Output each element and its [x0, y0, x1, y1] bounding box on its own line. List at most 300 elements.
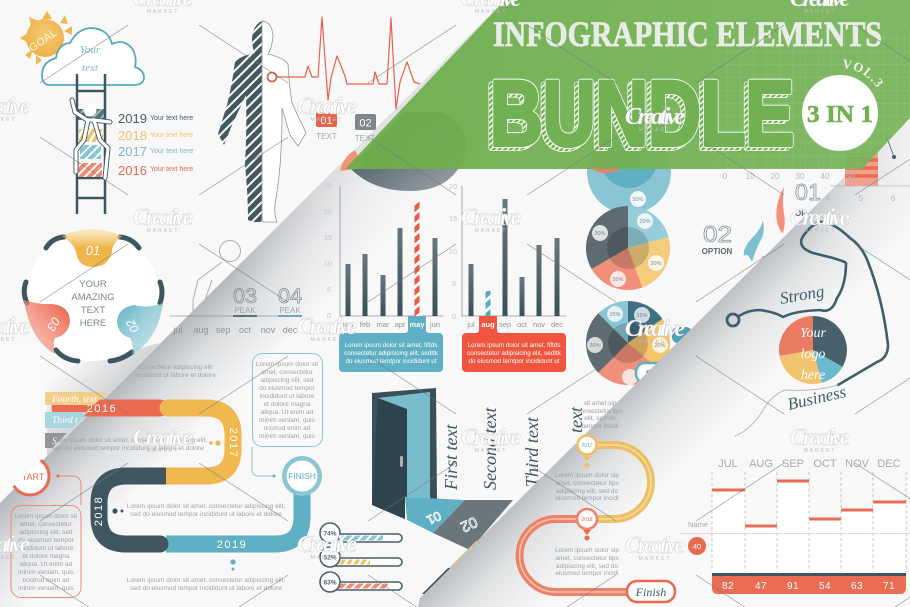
month labels: nov: [261, 325, 276, 335]
note box: red: do eiusmod temtpor incididunt ut: [468, 358, 560, 365]
legend: 2016: Your text here: [150, 166, 193, 173]
month labels: apr: [395, 320, 406, 329]
logo text: logo: [801, 347, 825, 362]
watermarks: MARKET: [147, 448, 179, 454]
bundle title: BUNDLE: [490, 63, 794, 165]
year legend: [118, 111, 193, 178]
marker: 2017: [578, 436, 596, 468]
pie chart: lower: 15%: [636, 313, 648, 319]
badge: 3 in 1: [802, 75, 878, 151]
step: teal: [80, 145, 101, 159]
bar chart: right: 15: [449, 214, 457, 223]
note box: red: Lorem ipsum dolor sit amet, fiftds: [468, 342, 560, 349]
fourth rotated label: text: [566, 406, 586, 433]
month labels: [718, 458, 901, 470]
option 01: OP: [795, 209, 807, 218]
option 01: [795, 179, 821, 218]
watermarks: MARKET: [311, 337, 343, 343]
month labels: feb: [360, 320, 370, 329]
segment: gold 2017: [166, 408, 233, 476]
flame: orange: [776, 187, 785, 233]
outline note box: teal: incididunt ut labore: [260, 393, 315, 400]
option text lines: 4 Your text: [756, 269, 791, 278]
month labels: aug: [193, 325, 209, 335]
y axis labels: 10: [324, 259, 332, 268]
snake captions: adipiscing elit, sed do: [556, 488, 618, 495]
axis numbers: 4: [826, 194, 831, 203]
totals bar: 91: [787, 581, 799, 592]
outline note box: teal: do eiusmod tempor: [259, 385, 316, 392]
label: Strong: Strong: [778, 281, 826, 308]
progress bars: [320, 523, 402, 592]
sun label: GOAL: [27, 27, 59, 54]
watermarks: MARKET: [147, 9, 179, 15]
petal: gold 01: 01: [86, 243, 100, 258]
rotated labels: Third text: [522, 416, 542, 487]
bar chart: right: 10: [449, 247, 457, 256]
axis numbers: 50: [846, 172, 855, 181]
icon: sun: [26, 19, 64, 57]
option 02: OPTION: [702, 247, 733, 256]
snake captions: tempor incidi: [582, 423, 618, 430]
rotated labels: [441, 407, 542, 491]
option text lines: text: [778, 240, 791, 249]
pie chart: middle: 30%: [594, 231, 606, 237]
totals bar: 63: [851, 581, 863, 592]
finish circle: FINISH: [288, 471, 316, 481]
door panel: [372, 398, 407, 520]
snake captions: amet, consectetur itps: [555, 480, 620, 487]
watermarks: MARKET: [639, 127, 671, 133]
step: yellow: [79, 129, 103, 142]
pie chart: lower: [586, 301, 670, 385]
snake captions: elit, sed do: [584, 415, 616, 422]
peak 04: PEAK: [279, 306, 301, 315]
legend: 2019: Your text here: [150, 115, 193, 122]
watermarks: MARKET: [639, 339, 671, 345]
legend: 2017: 2017: [118, 144, 147, 159]
outline note box: red: do eiusmod tempor: [18, 537, 75, 544]
ladder with climber: [72, 74, 110, 214]
month labels: may: [409, 320, 425, 329]
green banner: [345, 0, 910, 169]
outline note box: red: et dolore magna: [23, 553, 70, 560]
timeline captions: consectetur adipiscing elit: [138, 364, 212, 371]
snake timeline: [520, 436, 675, 602]
outline note box: red: [11, 474, 81, 598]
segment: dark 2018: [99, 476, 166, 544]
petal: red 03: 03: [44, 315, 63, 334]
option text lines: Your text: [762, 255, 791, 264]
segment: gold: [450, 540, 477, 567]
figure: striped half: [218, 21, 262, 222]
month labels: OCT: [813, 458, 837, 470]
pie chart: middle: 30%: [650, 261, 662, 267]
chart: peak axis: [170, 181, 332, 335]
axis numbers: 0: [723, 172, 728, 181]
start circle: START: [16, 472, 45, 482]
stepped column chart: [680, 458, 910, 594]
month labels: mar: [377, 320, 390, 329]
snake captions: amet, consectetur itps: [555, 555, 620, 562]
option 01: 01: [795, 179, 821, 205]
bar chart: right: 5: [452, 279, 456, 288]
month labels: oct: [517, 320, 528, 329]
step: orange: [78, 163, 102, 177]
step: dark: [78, 109, 104, 120]
peak 04: [278, 285, 302, 317]
watermarks: Creative: [790, 425, 850, 451]
badge 01: 01: [320, 115, 333, 127]
note box: teal: [339, 333, 443, 372]
watermarks: Creative: [133, 205, 193, 231]
snake captions: Lorem ipsum dolor sip: [555, 547, 619, 554]
folded ribbon: 01 and 02: [405, 497, 513, 594]
outline note box: teal: aliqua. Ut enim ad: [261, 409, 314, 416]
month labels: aug: [481, 320, 495, 329]
year labels: 2016: [87, 403, 117, 415]
peak 03: 03: [233, 285, 257, 308]
axis numbers: 40: [821, 172, 830, 181]
month labels: [342, 320, 440, 329]
door frame: [372, 388, 437, 505]
segment: teal 2019: [166, 490, 302, 544]
marker: 2018: [577, 509, 597, 540]
finish circle: [282, 456, 322, 496]
label: Business: Business: [786, 382, 848, 414]
center text: [71, 279, 115, 329]
outline note box: red: minim veniam, quis: [18, 569, 75, 576]
segment: dark: [422, 563, 477, 594]
segment: red 2016: [60, 400, 160, 416]
snake captions: consectetur itps: [577, 408, 624, 415]
ring start: [727, 314, 739, 326]
year labels: 2019: [217, 539, 247, 551]
snake captions: [555, 400, 624, 577]
bundle title: BUNDLE: [486, 66, 790, 168]
timeline captions: sed do eiusmod tempor incididunt ut labore et dolore: [130, 585, 282, 592]
totals bar: 54: [819, 581, 831, 592]
progress: 74%: 74%: [323, 530, 337, 538]
watermarks: MARKET: [311, 555, 343, 561]
door illustration: [372, 388, 437, 520]
dark bowl behind banner: [350, 112, 467, 191]
outline note box: teal: nostrud enim ad: [264, 425, 311, 432]
peak 04: 04: [278, 285, 302, 308]
totals bar: 82: [722, 581, 734, 592]
y axis labels: 5: [327, 285, 331, 294]
outline note box: red: incididunt ut labore: [19, 545, 74, 552]
climber: [72, 100, 110, 178]
logo pie: [779, 316, 847, 384]
icon: cloud: [42, 28, 144, 85]
totals bar: [712, 573, 906, 594]
rotated labels: Second text: [480, 407, 500, 490]
legend: 2019: [118, 111, 193, 126]
note box: red: consectetur adipisicing elit, sedttk: [467, 350, 562, 357]
level markers: [712, 480, 906, 528]
year labels: [87, 403, 247, 551]
outline note box: red: Lorem ipsum dolor sit: [15, 513, 77, 520]
axis numbers: 30: [796, 172, 805, 181]
year labels: 2018: [93, 496, 105, 526]
timeline captions: Lorem ipsum dolor sit amet, consectetur adipiscing elit,: [127, 577, 285, 584]
badge 02: TEXT: [355, 134, 375, 143]
note box: teal: do eiusmod temtpor incididunt ut: [345, 358, 437, 365]
cloud text: [80, 44, 101, 74]
watermarks: MARKET: [804, 228, 836, 234]
pie chart: lower: 20%: [654, 343, 666, 349]
note box: teal: consectetur adipisicing elit, sedttk: [344, 350, 439, 357]
cloud text: text: [82, 62, 99, 74]
progress: 52%: 52%: [323, 554, 337, 562]
month labels: sep: [216, 325, 230, 335]
watermarks: MARKET: [804, 9, 836, 15]
note box: red: [462, 333, 566, 372]
finish pill: Finish: [635, 585, 666, 599]
small orange arc behind banner: [340, 150, 364, 171]
month labels: oct: [239, 325, 251, 335]
year labels: 2017: [227, 428, 239, 458]
axis numbers: 10: [746, 172, 755, 181]
fold shadow fade near top right: [700, 112, 910, 320]
start pill: [636, 327, 692, 383]
month labels: jan: [342, 320, 353, 329]
legend: 2017: Your text here: [150, 148, 193, 155]
month labels: sep: [499, 320, 511, 329]
peak 03: [233, 285, 257, 317]
logo text: here: [801, 368, 825, 383]
figure: outline half: [262, 21, 306, 222]
column fill: [712, 481, 906, 573]
center text: AMAZING: [71, 292, 115, 303]
value badge: [688, 537, 706, 555]
timeline dots: [112, 440, 236, 570]
marker: 2018: 2018: [581, 517, 593, 523]
month labels: [172, 325, 298, 335]
watermarks: MARKET: [475, 9, 507, 15]
banner grid: [720, 30, 910, 169]
month labels: [466, 320, 563, 329]
axis numbers: 5: [859, 194, 864, 203]
outline note box: teal: adipiscing elit, sed: [260, 377, 314, 384]
start circle: [11, 457, 49, 495]
month labels: jun: [429, 320, 440, 329]
watermarks: Creative: [297, 94, 357, 120]
human figure: [218, 21, 306, 222]
option text lines: [756, 240, 791, 278]
highlighted bar: may: [414, 202, 420, 316]
timeline captions: [49, 364, 285, 592]
outline note box: red: adipiscing elit, sed: [19, 529, 73, 536]
marker: 2017: 2017: [581, 443, 593, 449]
axis numbers: 20: [771, 172, 780, 181]
watermarks: MARKET: [475, 448, 507, 454]
month labels: dec: [283, 325, 298, 335]
axis numbers: [723, 172, 896, 203]
logo text: [800, 326, 827, 383]
timeline captions: Lorem ipsum dolor sit amet, consectetur adipiscing elit,: [49, 437, 207, 444]
value badge: 40: [693, 542, 701, 551]
outline note box: teal: [252, 354, 322, 478]
legend: 2018: 2018: [118, 128, 147, 143]
path: gold: [595, 445, 651, 519]
tab: third: Third t: [52, 416, 78, 426]
logo text: Your: [800, 326, 827, 341]
watermarks: Creative: [297, 314, 357, 340]
legend: 2018: Your text here: [150, 132, 193, 139]
pie chart: middle: 20%: [639, 219, 651, 225]
rotated labels: First text: [441, 424, 461, 491]
option 02: [702, 221, 733, 256]
badge 02: [355, 114, 376, 143]
month labels: dec: [551, 320, 563, 329]
timeline captions: sed do eiusmod tempor incididunt ut labore et dolore: [52, 445, 204, 452]
month labels: nov: [533, 320, 545, 329]
y axis labels: 15: [324, 233, 332, 242]
ecg line: [277, 17, 420, 109]
bar chart: right: 0: [452, 312, 456, 321]
muscle arm outline: [727, 222, 888, 436]
outline note box: teal: et dolore magna: [264, 401, 311, 408]
watermarks: MARKET: [475, 228, 507, 234]
pie chart: lower: 30%: [589, 343, 601, 349]
timeline captions: incididunt ut labore et dolore: [134, 372, 216, 379]
watermarks: Creative: [461, 425, 521, 451]
watermarks: Creative: [625, 104, 685, 130]
month labels: JUL: [718, 458, 738, 470]
badge 02: 02: [359, 118, 372, 130]
finish pill: [627, 581, 675, 602]
center text: YOUR: [79, 279, 107, 290]
badge: 3 in 1: 3 IN 1: [807, 102, 873, 128]
month labels: SEP: [782, 458, 804, 470]
door handle: [400, 456, 403, 467]
note box: teal: Lorem ipsum dolor sit amet, fiftds: [345, 342, 437, 349]
axis numbers: 6: [891, 194, 896, 203]
upper left page: sun and cloud: [20, 11, 144, 85]
watermarks: Creative: [625, 533, 685, 559]
option 02: 02: [703, 221, 732, 247]
white flap on left: [0, 340, 45, 499]
pie chart: middle: 20%: [612, 277, 624, 283]
tab: second: S: [52, 437, 57, 447]
partial person outline behind fold: [193, 240, 240, 330]
petal: teal 02: 02: [123, 316, 142, 335]
snake captions: sit amet sip: [584, 400, 617, 407]
path: red: [520, 519, 632, 592]
month labels: jul: [172, 325, 183, 335]
heart marker: [268, 72, 276, 82]
watermarks: Creative: [625, 316, 685, 342]
donut chart: top, cut by banner: [587, 130, 671, 214]
circle body: [27, 229, 159, 361]
watermarks: MARKET: [311, 117, 343, 123]
bar chart: right: [449, 182, 566, 372]
tab bars on flap: [45, 392, 107, 448]
badge 01: [316, 112, 337, 141]
y axis labels: 25: [324, 181, 332, 190]
dark arcs: [24, 237, 162, 361]
outline note box: red: aliqua. Ut enim ad: [20, 561, 73, 568]
month labels: jul: [466, 320, 475, 329]
timeline captions: sed do eiusmod tempor incididunt ut labore et dolore: [130, 511, 282, 518]
totals bar: 71: [883, 581, 895, 592]
outline note box: teal: minim veniam, quis: [259, 417, 316, 424]
legend: 2016: 2016: [118, 163, 147, 178]
progress: 83%: 83%: [323, 580, 337, 586]
center text: HERE: [80, 318, 106, 329]
vol label: VOL.3: [843, 59, 883, 87]
bundle title: BUNDLE: [490, 63, 794, 165]
icon: sun rays: [20, 11, 72, 65]
flame: teal: [744, 216, 764, 262]
highlighted bar: aug: [486, 291, 490, 316]
month tab: aug: [475, 316, 501, 333]
y axis labels: 0: [327, 311, 331, 320]
peak 03: PEAK: [234, 306, 256, 315]
center text: TEXT: [81, 305, 105, 316]
watermarks: Creative: [133, 425, 193, 451]
watermarks: MARKET: [639, 556, 671, 562]
timeline ribbon: [60, 408, 302, 544]
month labels: DEC: [877, 458, 901, 470]
month tab: may: [404, 316, 430, 333]
pie chart: lower: 15%: [609, 312, 621, 318]
badge 01: TEXT: [316, 132, 337, 141]
snake captions: adipiscing elit, sed do: [556, 563, 618, 570]
watermarks: Creative: [790, 205, 850, 231]
fold shadow triangle below circle: [47, 343, 160, 456]
legend: 2019: 2019: [118, 111, 147, 126]
month labels: NOV: [845, 458, 870, 470]
snake captions: eiusmod tempor incidi: [555, 495, 619, 502]
tab: fourth: Fourth, text: [51, 395, 97, 405]
fold shadow: lower right page: [418, 112, 910, 607]
totals bar: 47: [755, 581, 767, 592]
striped bar: [845, 153, 878, 186]
watermarks: MARKET: [147, 228, 179, 234]
donut chart: top, cut by banner: 50%: [632, 197, 644, 203]
snake captions: eiusmod tempor incidi: [555, 570, 619, 577]
watermarks: Creative: [461, 205, 521, 231]
outline note box: red: amet, consectetur: [20, 521, 73, 528]
segment: 01: 01: [424, 508, 444, 528]
pie chart: middle: [586, 206, 670, 290]
outline note box: red: minim veniam, quis: [18, 585, 75, 592]
bundle title: BUNDLE: [486, 66, 790, 168]
y axis labels: [324, 181, 332, 320]
outline note box: teal: amet, consectetur: [261, 369, 314, 376]
legend: 2018: [118, 128, 193, 143]
outline note box: teal: minim veniam, quis: [259, 433, 316, 440]
outline note box: teal: Lorem ipsum dolor sit: [256, 361, 318, 368]
cloud text: Your: [80, 44, 101, 56]
ladder rails and rungs: [77, 74, 105, 214]
top right axis: [723, 138, 910, 203]
door opening: [378, 392, 430, 500]
legend: 2017: [118, 144, 193, 159]
outline note box: red: nostrud enim ad: [23, 577, 70, 584]
watermarks: Creative: [297, 532, 357, 558]
month labels: AUG: [749, 458, 773, 470]
start pill: Start: [645, 368, 668, 380]
y axis labels: 20: [324, 207, 332, 216]
bar chart: left: [339, 186, 443, 372]
watermarks: MARKET: [804, 448, 836, 454]
legend: 2016: [118, 163, 193, 178]
timeline captions: Lorem ipsum dolor sit amet, consectetur adipiscing elit,: [127, 503, 285, 510]
